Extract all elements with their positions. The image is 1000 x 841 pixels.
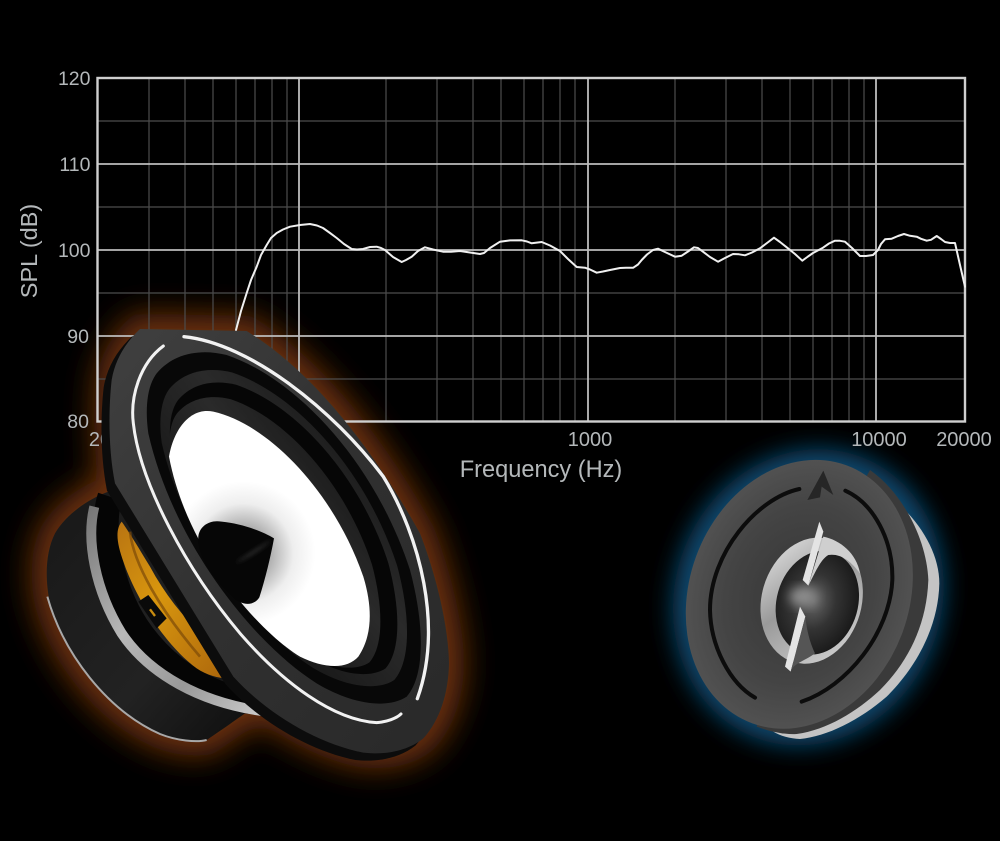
tweeter speaker	[649, 428, 950, 761]
frame recess	[147, 352, 421, 704]
y axis labels: 100	[58, 240, 91, 262]
major grid lines	[97, 78, 965, 422]
orange glow behind woofer	[47, 329, 449, 753]
dome highlight	[789, 587, 817, 607]
x axis labels: 20	[89, 429, 111, 451]
rubber surround	[160, 370, 407, 686]
frequency response chart	[16, 68, 992, 483]
y axis labels: 120	[58, 68, 91, 90]
frame face	[109, 329, 449, 753]
logo mark	[807, 471, 833, 500]
motor magnet	[47, 492, 267, 741]
phase plug blades	[785, 522, 860, 672]
metal ring	[746, 525, 877, 676]
blue glow behind tweeter	[632, 411, 985, 784]
y axis labels: 90	[67, 326, 89, 348]
frame rear edge	[101, 336, 441, 761]
x axis labels: 10000	[851, 429, 907, 451]
y axis title: SPL (dB)	[16, 204, 42, 298]
x axis title: Frequency (Hz)	[460, 457, 622, 483]
amber basket	[117, 522, 240, 678]
face slots	[710, 489, 892, 702]
dome	[764, 541, 871, 665]
y axis labels: 110	[59, 154, 91, 176]
minor grid lines	[97, 78, 965, 422]
dust cap	[198, 521, 274, 604]
plot border	[98, 78, 965, 422]
woofer speaker	[47, 329, 449, 761]
x axis labels: 20000	[936, 429, 992, 451]
frame slots	[133, 337, 428, 723]
response curve	[236, 224, 965, 330]
x axis labels: 1000	[568, 429, 612, 451]
tweeter face	[649, 428, 950, 761]
white cone	[169, 411, 370, 666]
y axis labels: 80	[67, 411, 89, 433]
dark side wall	[757, 470, 928, 734]
silver rear edge	[773, 497, 939, 739]
y axis labels	[58, 68, 91, 433]
x axis labels	[89, 429, 992, 451]
